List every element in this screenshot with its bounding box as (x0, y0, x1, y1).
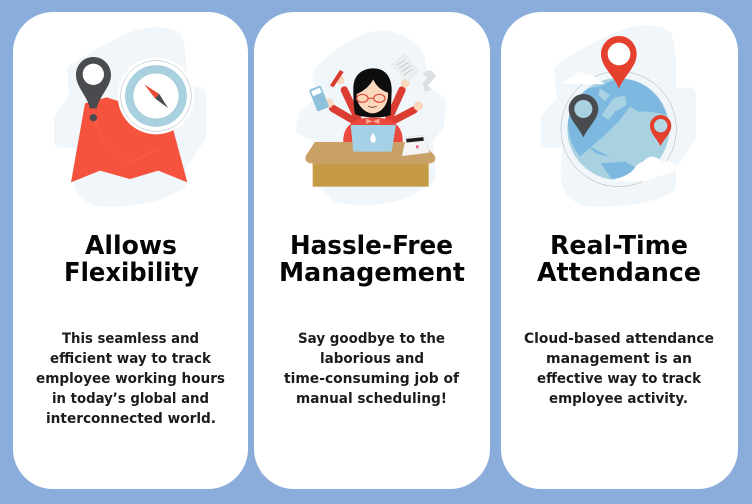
text block: management description: laborious and (320, 351, 424, 367)
hair (353, 68, 392, 117)
heading: allows flexibility: Flexibility (64, 258, 199, 288)
heading: allows flexibility: Allows (85, 231, 177, 261)
arms (333, 90, 414, 123)
text block: management description: manual scheduling! (296, 391, 447, 407)
text block: attendance description: Cloud-based attendance (524, 331, 714, 347)
pen (330, 70, 344, 87)
pin: small red (650, 115, 671, 146)
heading: hassle-free management (279, 231, 465, 288)
heading: real-time attendance: Attendance (537, 258, 701, 288)
desk (313, 163, 429, 187)
icon: map with pin and compass (60, 33, 200, 200)
paper (392, 54, 418, 82)
heading: hassle-free management: Management (279, 258, 465, 288)
icon: globe with location pins (547, 32, 690, 201)
pin: dark (569, 94, 598, 137)
text block: flexibility description: employee working hours (36, 371, 225, 387)
text block: flexibility description: interconnected world. (46, 411, 216, 427)
hands (336, 76, 344, 84)
text block: management description (284, 331, 460, 407)
calendar (402, 135, 429, 156)
text block: attendance description: management is an (546, 351, 692, 367)
clouds (563, 72, 605, 84)
text block: flexibility description (36, 331, 225, 427)
heading: allows flexibility (64, 231, 199, 288)
panel: allows flexibility (13, 12, 248, 489)
heading: real-time attendance: Real-Time (550, 231, 688, 261)
panel: hassle-free management (254, 12, 490, 489)
text block: attendance description: employee activity. (549, 391, 688, 407)
pin: red large (601, 36, 637, 88)
text block: attendance description (524, 331, 714, 407)
heading: real-time attendance (537, 231, 701, 288)
text block: management description: Say goodbye to the (298, 331, 445, 347)
text block: flexibility description: in today’s global and (52, 391, 209, 407)
heading: hassle-free management: Hassle-Free (290, 231, 453, 261)
text block: attendance description: effective way to track (537, 371, 702, 387)
laptop (351, 125, 396, 152)
wrench (423, 71, 436, 92)
text block: flexibility description: This seamless and (62, 331, 199, 347)
panel: real-time attendance (501, 12, 738, 489)
icon: multitasking woman at desk (302, 37, 440, 199)
text block: flexibility description: efficient way to track (50, 351, 212, 367)
calculator (309, 85, 329, 112)
text block: management description: time-consuming job of (284, 371, 460, 387)
